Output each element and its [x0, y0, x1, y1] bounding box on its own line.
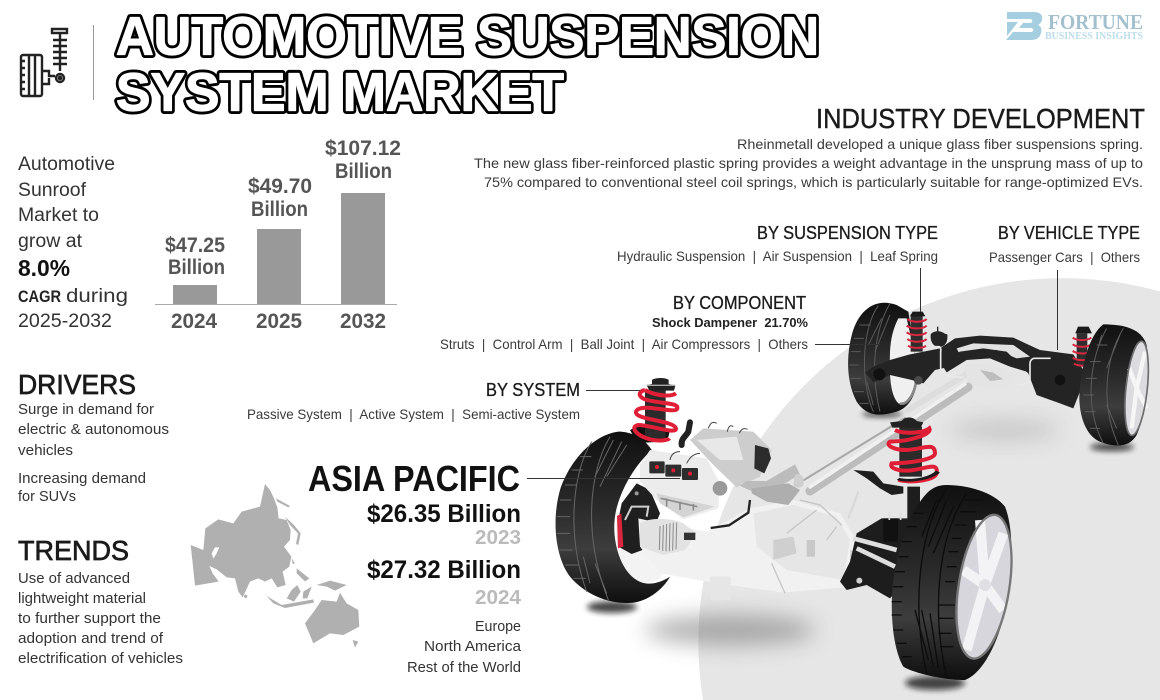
- intro text: Sunroof: [18, 180, 87, 201]
- by vehicle type label: BY VEHICLE TYPE: [998, 223, 1140, 243]
- front-left tire and hub: [556, 432, 670, 603]
- by component label: Struts | Control Arm | Ball Joint | Air Compressors | Others: [440, 336, 808, 352]
- rear axle frame: [865, 327, 1083, 408]
- by system label: [247, 380, 580, 422]
- bar chart: 2025: [256, 310, 302, 333]
- icon: suspension: [21, 29, 67, 96]
- front-right spring: [889, 417, 940, 482]
- drivers: DRIVERS: [18, 369, 136, 400]
- title: SYSTEM MARKET: [116, 62, 564, 122]
- callout lines: [527, 268, 1058, 478]
- drivers: [18, 369, 169, 505]
- rear-left tire: [848, 303, 917, 415]
- bar chart: Billion: [335, 160, 392, 183]
- title: [116, 6, 819, 122]
- by component label: BY COMPONENT: [673, 293, 806, 313]
- industry development: [474, 103, 1145, 190]
- title: AUTOMOTIVE SUSPENSION: [116, 6, 819, 66]
- intro text: [18, 154, 128, 332]
- intro text: Automotive: [18, 154, 115, 175]
- divider: [93, 25, 94, 100]
- asia pacific values: 2024: [475, 587, 522, 609]
- bar chart: Billion: [251, 198, 308, 221]
- trends: [18, 535, 183, 667]
- by suspension type label: [617, 223, 938, 264]
- industry development: Rheinmetall developed a unique glass fiber suspensions spring.: [737, 136, 1143, 152]
- intro text: Market to: [18, 205, 99, 226]
- trends: TRENDS: [18, 535, 129, 566]
- intro text: 2025-2032: [18, 311, 112, 332]
- drivers: vehicles: [18, 442, 73, 459]
- asia pacific values: 2023: [475, 527, 521, 549]
- trends: to further support the: [18, 610, 161, 627]
- by suspension type label: Hydraulic Suspension | Air Suspension | Leaf Spring: [617, 248, 938, 264]
- by system label: BY SYSTEM: [486, 380, 580, 400]
- transmission and engine: [638, 422, 858, 600]
- intro text: 8.0%: [18, 255, 70, 281]
- by component label: Shock Dampener 21.70%: [652, 315, 808, 330]
- title: SYSTEM MARKET: [116, 62, 564, 122]
- bar chart: 2032: [340, 310, 386, 333]
- asia pacific values: $27.32 Billion: [367, 556, 521, 584]
- bar chart: $49.70: [248, 175, 312, 198]
- rear-right spring: [1073, 327, 1092, 367]
- intro text: grow at: [18, 231, 83, 252]
- logo: FORTUNE: [1048, 10, 1143, 34]
- intro text: CAGR: [18, 287, 61, 306]
- by component label: [440, 293, 808, 352]
- drivers: for SUVs: [18, 488, 76, 505]
- trends: Use of advanced: [18, 570, 130, 587]
- drive rods: [804, 372, 970, 491]
- ground shadows: [645, 421, 1060, 645]
- bar chart: Billion: [168, 256, 225, 279]
- bar chart: 2024: [171, 310, 217, 333]
- map: Asia Pacific: [191, 484, 359, 648]
- drivers: Increasing demand: [18, 470, 146, 487]
- bar chart: $107.12: [325, 137, 401, 160]
- front-right tire: [892, 485, 1020, 680]
- bar chart: [155, 137, 401, 333]
- by suspension type label: BY SUSPENSION TYPE: [757, 223, 938, 243]
- asia pacific values: $26.35 Billion: [367, 500, 521, 528]
- front-right suspension arm and halfshaft: [840, 470, 920, 598]
- bar chart: $47.25: [165, 234, 225, 257]
- front-left spring: [630, 378, 677, 443]
- by vehicle type label: [989, 223, 1140, 265]
- industry development: The new glass fiber-reinforced plastic spring provides a weight advantage in the unsprung mass of up to: [474, 155, 1143, 171]
- by system label: Passive System | Active System | Semi-active System: [247, 406, 580, 422]
- asia pacific values: [308, 458, 522, 676]
- background circle: [698, 278, 1160, 700]
- tire contact shadows: [587, 411, 1134, 690]
- asia pacific values: North America: [424, 638, 522, 655]
- trends: adoption and trend of: [18, 630, 164, 647]
- asia pacific values: ASIA PACIFIC: [308, 458, 520, 499]
- drivers: Surge in demand for: [18, 401, 154, 418]
- by vehicle type label: Passenger Cars | Others: [989, 249, 1140, 265]
- drivers: electric & autonomous: [18, 421, 169, 438]
- logo: [1006, 10, 1143, 42]
- trends: electrification of vehicles: [18, 650, 183, 667]
- rear-right tire: [1079, 324, 1152, 446]
- suspension chassis illustration: [556, 303, 1152, 690]
- title: AUTOMOTIVE SUSPENSION: [116, 6, 819, 66]
- industry development: 75% compared to conventional steel coil springs, which is particularly suitable for range-optimized EVs.: [484, 174, 1143, 190]
- logo: BUSINESS INSIGHTS: [1045, 31, 1143, 42]
- rear-left spring: [907, 312, 927, 352]
- asia pacific values: Rest of the World: [407, 659, 521, 676]
- asia pacific values: Europe: [475, 618, 521, 635]
- trends: lightweight material: [18, 590, 146, 607]
- intro text: during: [66, 286, 128, 307]
